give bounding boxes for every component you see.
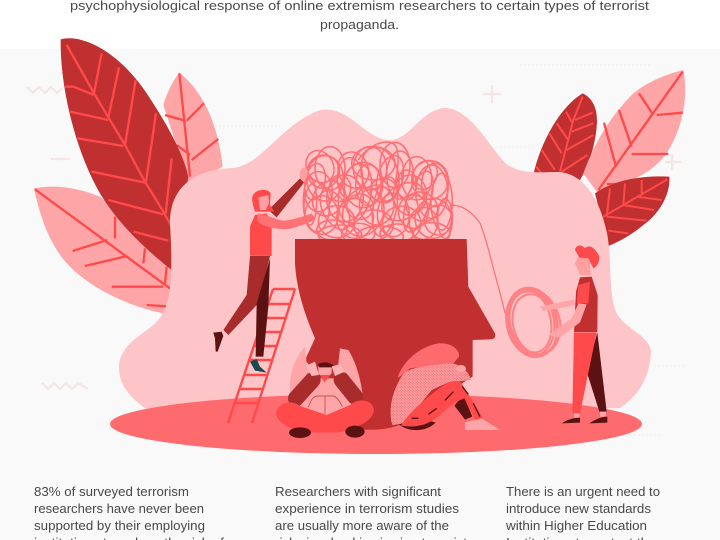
hand [456, 365, 466, 372]
polka dot sweater [391, 363, 471, 425]
text column 3: within Higher Education [505, 519, 647, 533]
head silhouette [295, 239, 495, 430]
figure: seated man holding head [276, 347, 374, 438]
text column 2: are usually more aware of the [275, 519, 449, 533]
back arm [540, 299, 575, 311]
background blob [119, 108, 651, 420]
face [575, 253, 591, 276]
leg front [223, 256, 270, 335]
back leg [587, 332, 607, 412]
text column 1: researchers have never been [34, 502, 204, 516]
back leg [454, 395, 472, 420]
decorative marks [27, 65, 685, 435]
figure: woman on ladder [213, 167, 316, 373]
hair [398, 343, 459, 378]
text column 2: Researchers with significant [275, 485, 442, 499]
text column 1 [34, 485, 225, 540]
leaf: large dark [61, 38, 188, 273]
ladder [228, 289, 295, 423]
hoodie torso [298, 378, 353, 416]
front arm [548, 303, 587, 338]
figure: seated woman hugging knees [391, 343, 500, 430]
text column 3: There is an urgent need to [506, 485, 660, 499]
leaf: dark lower [595, 176, 669, 246]
text column 3: introduce new standards [506, 502, 651, 516]
ankles and shoes [574, 412, 606, 418]
crossed legs [276, 401, 374, 433]
floor ellipse [110, 394, 642, 454]
leg back [256, 258, 270, 357]
torso [574, 277, 598, 332]
forearms [296, 380, 313, 398]
dark underside [399, 418, 436, 430]
leaf: dark upper [533, 93, 597, 180]
upper arms [290, 347, 315, 395]
leaves: left cluster [34, 38, 223, 313]
leaf: pink left [34, 187, 177, 313]
hair [575, 246, 599, 268]
intro text [70, 0, 650, 32]
text column 3 [505, 485, 660, 540]
feet [465, 418, 500, 430]
leaf: pink top [163, 73, 223, 187]
text column 1: 83% of surveyed terrorism [34, 485, 189, 499]
raised arm [268, 178, 304, 217]
face [258, 195, 269, 210]
cord to coil [452, 205, 505, 313]
shoes [289, 427, 311, 438]
shoes [213, 332, 223, 352]
text column 2: experience in terrorism studies [275, 502, 459, 516]
leaves: right cluster [533, 70, 685, 246]
text column 2 [275, 485, 468, 540]
face and hands [318, 365, 332, 379]
leaf: pink [583, 70, 685, 192]
scribble of tangled thoughts [301, 142, 505, 313]
text column 1: supported by their employing [34, 519, 205, 533]
front leg [572, 332, 597, 413]
front leg [401, 381, 483, 427]
figure: man holding coil [499, 246, 607, 423]
reaching arm [257, 213, 316, 229]
rope coil [499, 282, 569, 362]
hair [252, 190, 274, 212]
torso [250, 213, 272, 256]
intro text: propaganda. [320, 18, 399, 32]
